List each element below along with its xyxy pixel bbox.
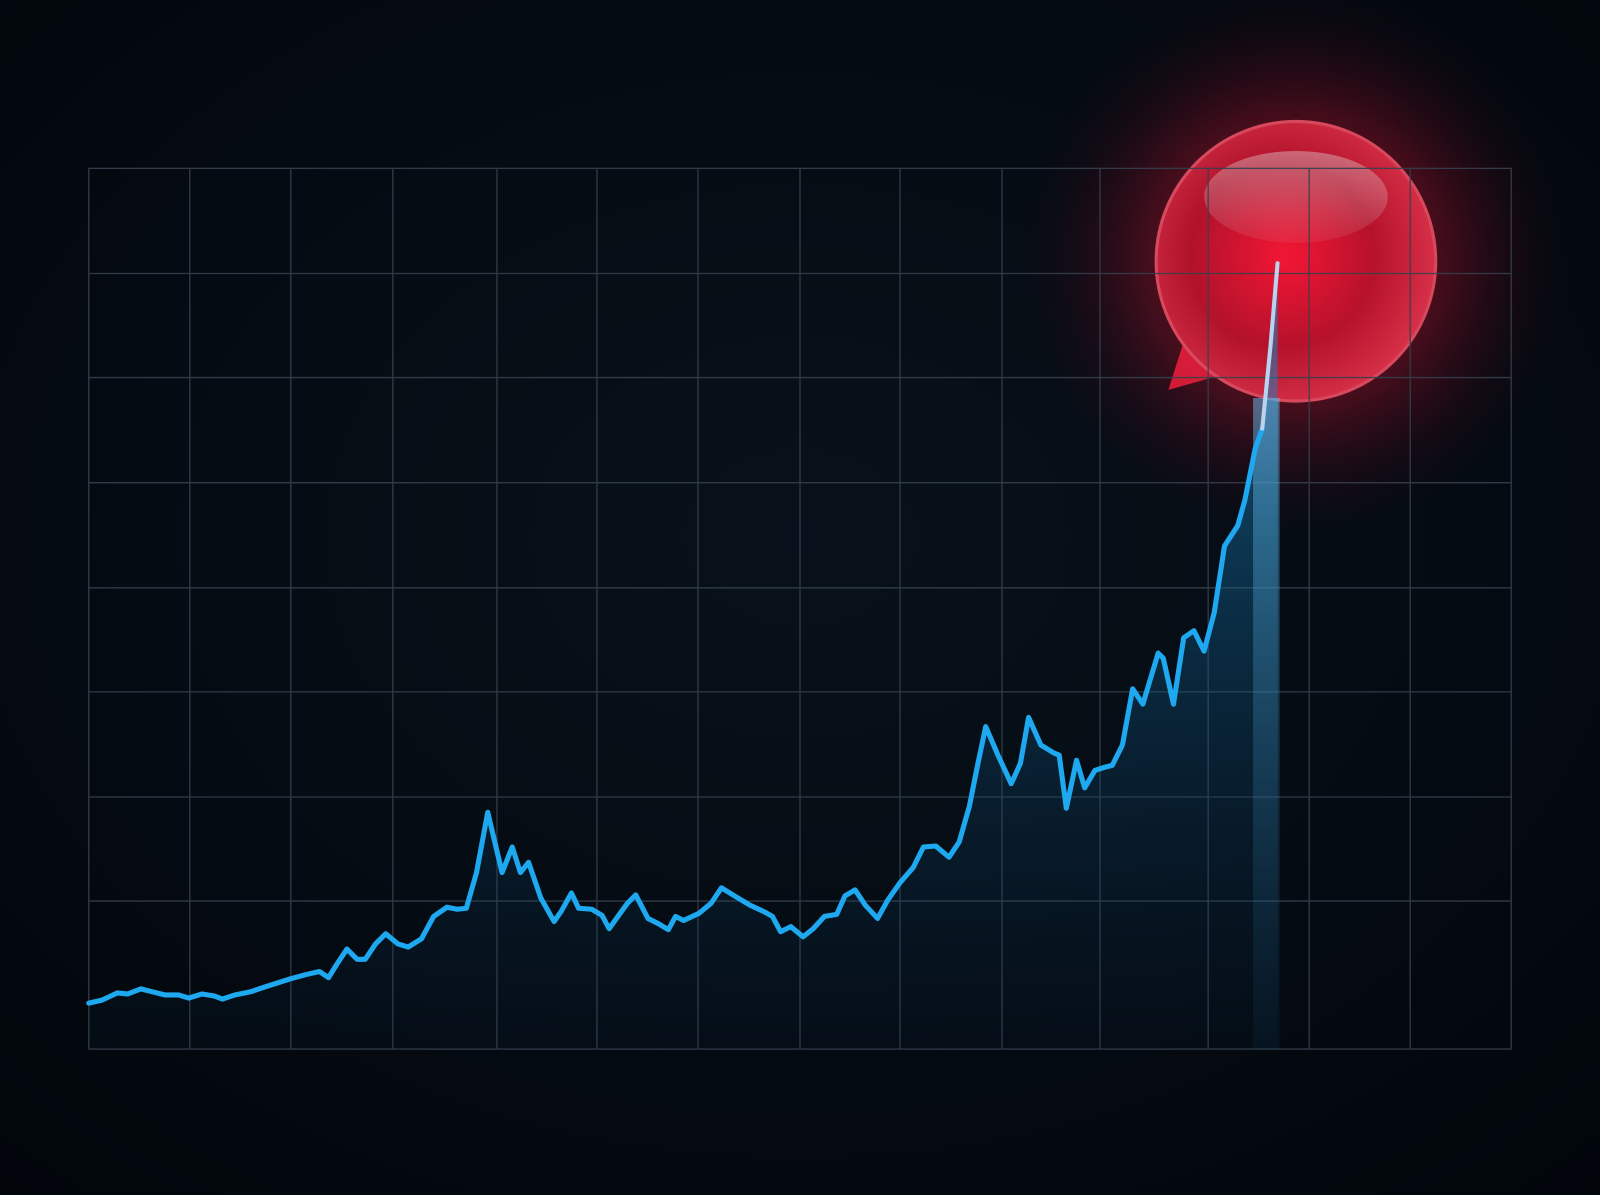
grid (89, 168, 1511, 1049)
speech bubble (1156, 121, 1436, 401)
line tip inside bubble (1262, 263, 1278, 429)
area fill under line (89, 263, 1278, 1049)
red glow (1020, 0, 1571, 537)
highlight column under peak (1253, 398, 1280, 1049)
line (89, 429, 1262, 1003)
